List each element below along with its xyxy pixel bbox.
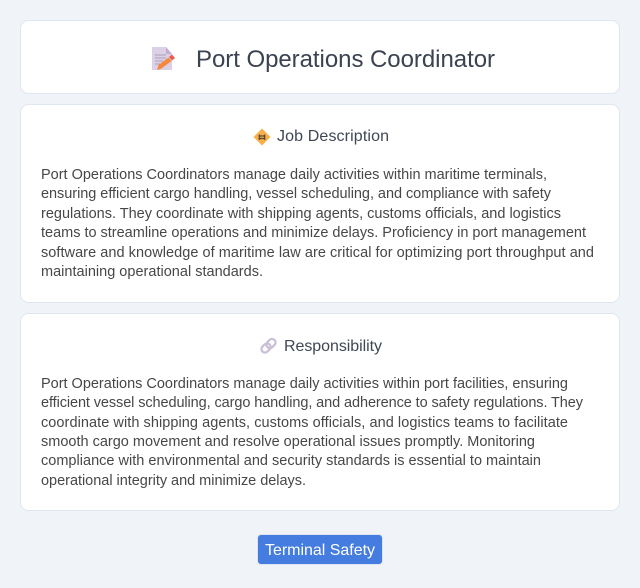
heading: job description: Job Description: [277, 128, 389, 145]
panel: job description: [20, 104, 620, 302]
text block: job description: Port Operations Coordinators manage daily activities within maritime terminals,: [41, 167, 547, 183]
text block: responsibility: [41, 376, 584, 489]
text block: responsibility: efficient vessel scheduling, cargo handling, and adherence to safety regulations. They: [41, 395, 584, 411]
title: Port Operations Coordinator: [196, 46, 495, 73]
button: terminal safety: Terminal Safety: [265, 542, 375, 559]
panel: responsibility: [20, 314, 620, 510]
text block: responsibility: compliance with environmental and security standards is essential to maintain: [41, 453, 541, 469]
text block: responsibility: Port Operations Coordinators manage daily activities within port facilities, ensuring: [41, 376, 568, 392]
icon: chain link: [260, 337, 277, 354]
icon: memo with pencil: [152, 47, 175, 70]
text block: job description: regulations. They coordinate with shipping agents, customs officials, and logistics: [41, 206, 561, 222]
icon: orange diamond sign: [254, 128, 270, 146]
text block: job description: [41, 167, 594, 280]
text block: job description: teams to streamline operations and minimize delays. Proficiency in port management: [41, 225, 586, 241]
text block: responsibility: smooth cargo movement and resolve operational issues promptly. Monitoring: [41, 434, 535, 450]
text block: responsibility: operational integrity and minimize delays.: [41, 473, 306, 489]
text block: responsibility: coordinate with shipping agents, customs officials, and logistics teams to facilitate: [41, 415, 568, 431]
panel: title card: [20, 20, 620, 94]
button: terminal safety: [258, 534, 382, 564]
text block: job description: maintaining operational standards.: [41, 264, 263, 280]
text block: job description: software and knowledge of maritime law are critical for optimizing port throughput and: [41, 245, 594, 261]
text block: job description: ensuring efficient cargo handling, vessel scheduling, and compliance with safety: [41, 186, 552, 202]
heading: responsibility: Responsibility: [284, 338, 382, 355]
